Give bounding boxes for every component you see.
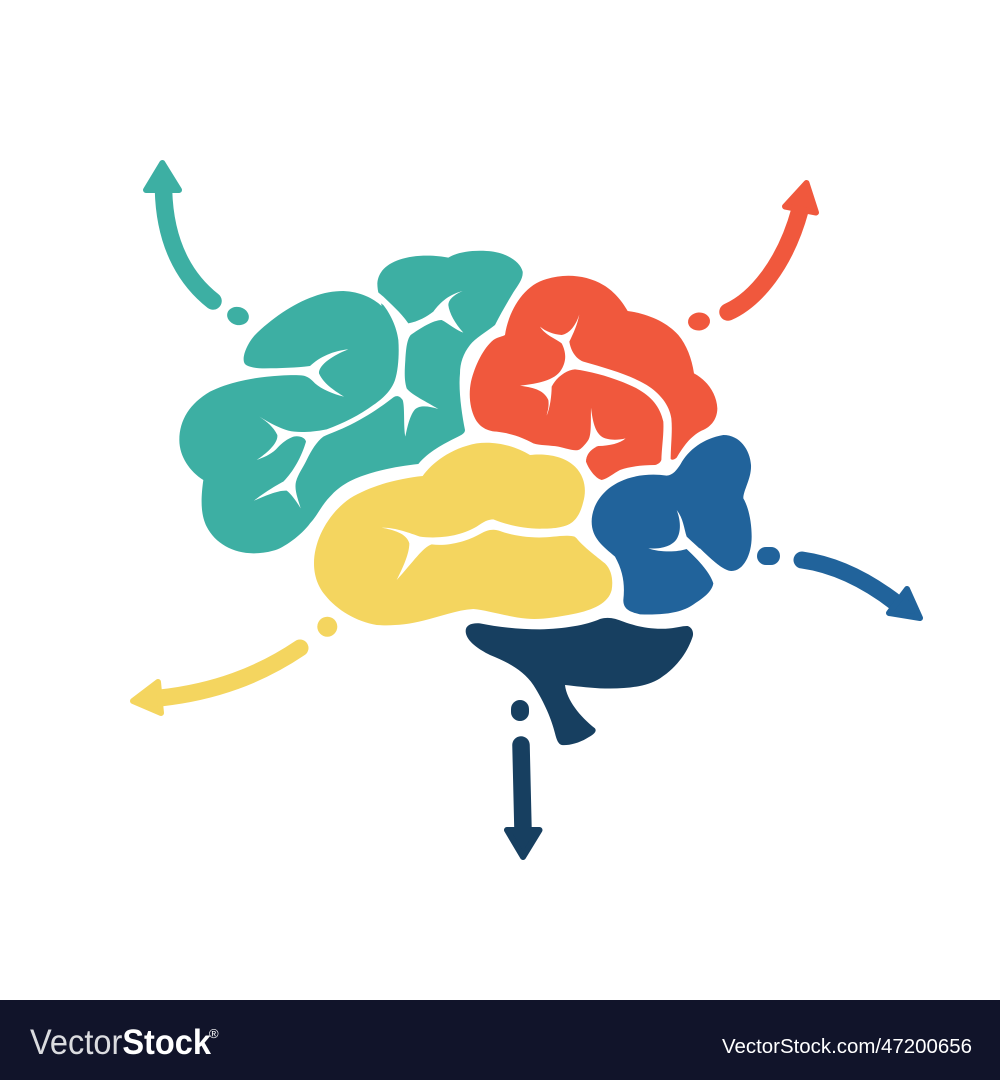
brain: yellow lobe (temporal) xyxy=(314,443,612,625)
footer logo: VectorStock: VectorStock xyxy=(30,1023,211,1062)
brain: orange lobe (parietal) xyxy=(470,276,717,480)
arrow: teal up-left xyxy=(146,163,251,328)
footer bar xyxy=(0,1000,1000,1080)
brain: navy brainstem and cerebellum xyxy=(466,618,693,745)
brain: teal lobe (frontal) xyxy=(179,251,523,553)
footer logo: registered mark: ® xyxy=(209,1026,219,1041)
arrow: orange up-right xyxy=(687,183,816,331)
arrow: blue right xyxy=(757,547,920,618)
footer image id: VectorStock.com/47200656 xyxy=(722,1036,972,1058)
brain: blue lobe (occipital) xyxy=(592,435,752,615)
arrow: navy down xyxy=(507,700,540,857)
arrow: yellow lower-left xyxy=(133,617,337,713)
